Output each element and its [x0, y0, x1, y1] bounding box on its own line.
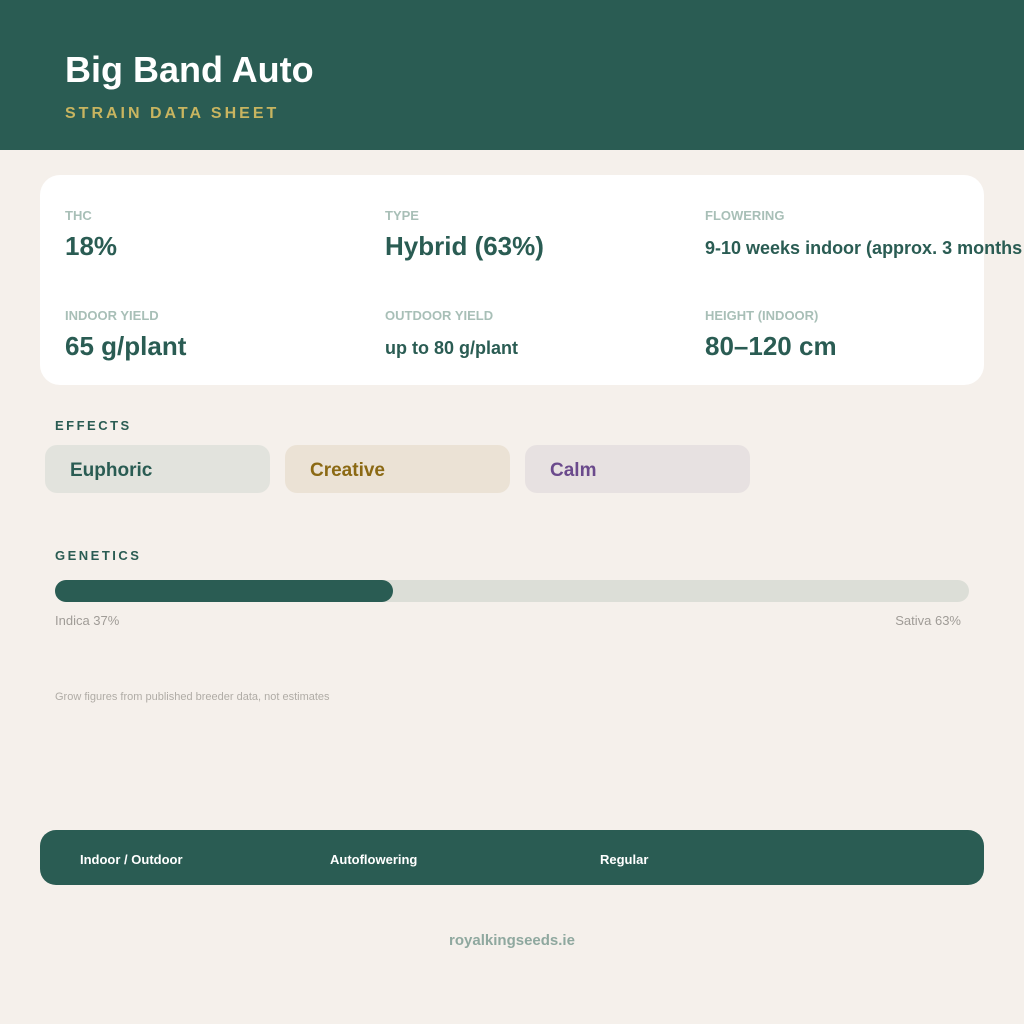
stat: THC: 18% [65, 231, 117, 261]
stat: flowering [705, 208, 1022, 258]
stat: outdoor yield [385, 308, 518, 358]
stat: indoor yield: INDOOR YIELD [65, 308, 159, 323]
stat: indoor yield [65, 308, 187, 361]
stat: indoor height: HEIGHT (INDOOR) [705, 308, 818, 323]
stat: type: TYPE [385, 208, 419, 223]
genetics heading: GENETICS [55, 548, 141, 563]
effect chip: Euphoric: Euphoric [70, 460, 153, 481]
tag: flowering type: Autoflowering [330, 852, 417, 867]
header banner [0, 0, 1024, 150]
data note: Grow figures from published breeder data, not estimates [55, 691, 330, 703]
stat: flowering: 9-10 weeks indoor (approx. 3 months [705, 238, 1022, 258]
stat: THC [65, 208, 117, 261]
effect chip: Creative [285, 445, 510, 493]
stat: indoor yield: 65 g/plant [65, 331, 187, 361]
stat: outdoor yield: up to 80 g/plant [385, 338, 518, 358]
tag: seed type: Regular [600, 852, 648, 867]
title: Big Band Auto [65, 49, 314, 90]
stat: type: Hybrid (63%) [385, 231, 544, 261]
panel: strain stats [40, 175, 1022, 385]
stat: outdoor yield: OUTDOOR YIELD [385, 308, 493, 323]
indica label: Indica 37% [55, 613, 120, 628]
stat: flowering: FLOWERING [705, 208, 784, 223]
footer bar [40, 830, 984, 885]
genetics bar [55, 580, 969, 602]
stat: type [385, 208, 544, 261]
tag: environment: Indoor / Outdoor [80, 852, 183, 867]
indica share [55, 580, 393, 602]
subtitle: STRAIN DATA SHEET [65, 105, 279, 122]
sativa label: Sativa 63% [895, 613, 961, 628]
website: royalkingseeds.ie [449, 932, 575, 949]
effect chip: Creative: Creative [310, 460, 385, 481]
effect chip: Calm [525, 445, 750, 493]
stat: THC: THC [65, 208, 92, 223]
stat: indoor height: 80–120 cm [705, 331, 837, 361]
effect chip: Calm: Calm [550, 460, 596, 481]
effect chip: Euphoric [45, 445, 270, 493]
stat: indoor height [705, 308, 837, 361]
effects heading: EFFECTS [55, 418, 132, 433]
